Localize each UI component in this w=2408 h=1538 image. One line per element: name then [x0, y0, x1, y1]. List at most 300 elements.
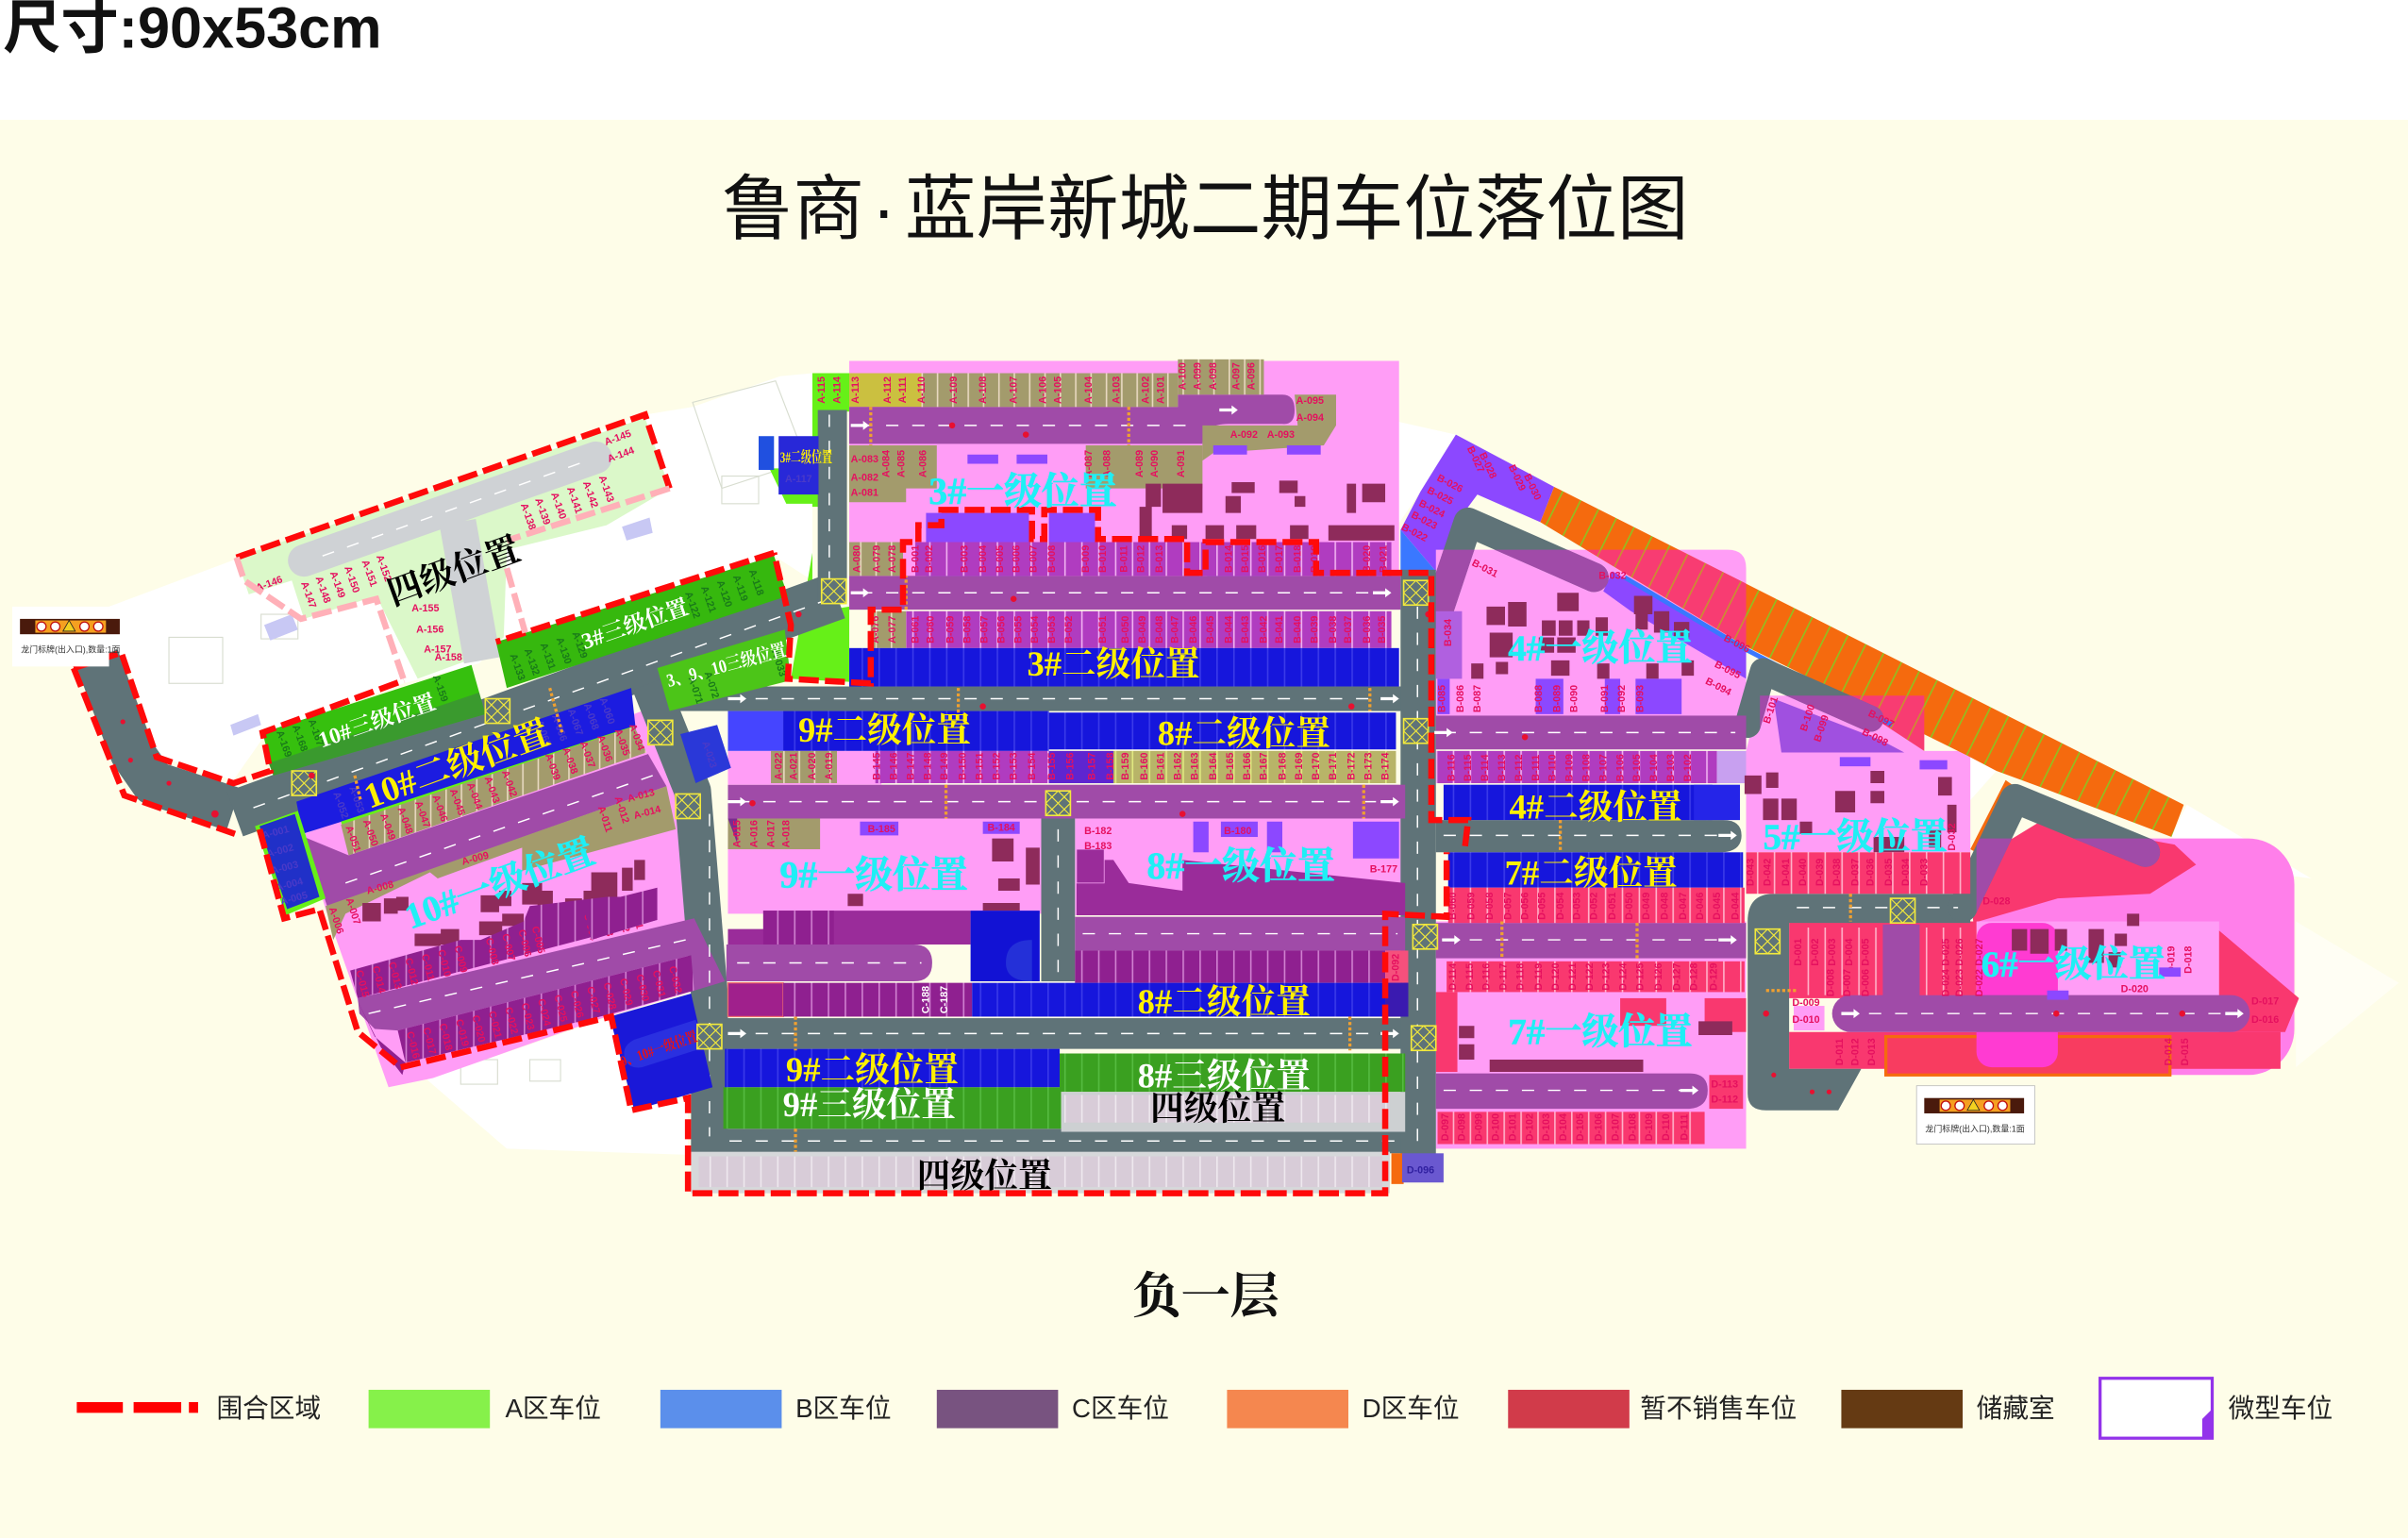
7# D lower row: D-100 — [1490, 1113, 1501, 1141]
drawing detail west — [169, 381, 806, 1084]
10# 二级 blue band: A-052 — [330, 791, 350, 820]
4# top spots: B-028 — [1477, 451, 1498, 480]
四级 spaces labels: A-157 — [424, 644, 451, 656]
4# B-085 row: B-088 — [1533, 685, 1545, 712]
10# 三级 green band: A-168 — [290, 724, 309, 753]
7# D lower row: D-110 — [1661, 1113, 1672, 1141]
3# B-001 row: A-080 — [851, 545, 862, 573]
7# D upper row: D-057 — [1503, 893, 1514, 920]
10# A-034 row: A-051 — [343, 824, 362, 854]
10# olive row 2: A-007 — [343, 896, 362, 927]
6# D rows: D-013 — [1866, 1038, 1878, 1066]
legend: A zone — [369, 1390, 601, 1429]
zone: lime green west of 3# — [769, 373, 849, 682]
4# B-085 row: B-090 — [1568, 685, 1580, 712]
9 10# 一级 cap — [624, 1020, 705, 1067]
6# D rows: D-027 — [1974, 938, 1985, 966]
10# 三级 green band: A-169 — [274, 729, 293, 759]
label: 9#三级位置: 9#三级位置 — [783, 1085, 956, 1124]
7# D lower row: D-102 — [1524, 1113, 1535, 1141]
9# 8# spaces row: B-145 — [872, 753, 883, 780]
9# 8# spaces row: B-166 — [1242, 753, 1253, 780]
7# D lower row — [1437, 1075, 1743, 1145]
四级 spaces labels: A-146 — [255, 574, 284, 594]
3# B-035 row: B-058 — [962, 616, 974, 644]
3# B-035 row: B-055 — [1012, 616, 1024, 644]
3# second row: A-081 to A-091: A-085 — [896, 450, 908, 477]
7# D lower row: D-108 — [1627, 1113, 1638, 1141]
9# lower spaces: C-188 — [921, 986, 932, 1013]
9# zone spaces — [727, 818, 1020, 849]
9# 8# spaces row: B-155 — [1046, 753, 1058, 780]
9# 8# spaces row: B-156 — [1065, 753, 1077, 780]
3# B-001 row: B-019 — [1309, 545, 1320, 573]
3 9 10 三级 green band: A-071 — [686, 676, 705, 705]
7# D lower row: D-103 — [1541, 1113, 1552, 1141]
5# loop spots: B-101 — [1762, 695, 1781, 725]
4# B-102 row: B-114 — [1480, 754, 1491, 781]
5# D row: D-037 — [1849, 859, 1861, 886]
9# 8# road — [727, 785, 1405, 818]
bottom strip — [1886, 1037, 2170, 1075]
10# C lower row: C-031 — [650, 969, 667, 998]
9# 8# spaces row — [727, 751, 1396, 785]
10# olive row 2: A-014 — [632, 804, 662, 822]
10# A-034 row: A-038 — [560, 745, 579, 776]
9# 8# spaces row: A-021 — [789, 753, 800, 780]
4# B-102 row — [1436, 751, 1747, 783]
3# top row: A-096 to A-115: A-097 — [1230, 362, 1242, 390]
10# A-034 row: A-042 — [499, 769, 519, 798]
3# top row: A-096 to A-115: A-104 — [1083, 376, 1095, 404]
orange D band — [1540, 487, 2183, 837]
label: 8#二级位置 upper: 8#二级位置 — [1158, 713, 1330, 752]
7# D upper row: B-060 — [1447, 893, 1459, 920]
3# top row: A-096 to A-115: A-108 — [978, 376, 989, 404]
4# B-102 row: B-110 — [1547, 754, 1559, 781]
blue corner — [1400, 530, 1436, 607]
4# B-102 row: B-106 — [1614, 754, 1626, 781]
road hatch marks — [355, 407, 1850, 1152]
7# D middle row: D-114 — [1447, 963, 1459, 990]
4# B-102 row: B-112 — [1513, 754, 1525, 781]
white site background west — [109, 373, 812, 780]
3# B-035 row: B-040 — [1293, 616, 1304, 644]
4# top spots: B-024 — [1417, 498, 1446, 521]
3# second row: A-081 to A-091: A-089 — [1134, 450, 1145, 477]
3# top row: A-096 to A-115: A-102 — [1140, 376, 1151, 404]
8# zone — [1077, 822, 1405, 915]
3# second row: A-081 to A-091: A-086 — [917, 450, 928, 477]
D-096 block — [1392, 1153, 1444, 1184]
8# 三级 band — [1060, 1054, 1405, 1092]
3# 二级 blue band — [849, 648, 1399, 687]
3# 二级 small block — [759, 436, 818, 494]
orange D band pink overlap 5# — [1840, 695, 1924, 751]
6# D rows: D-026 — [1954, 938, 1965, 966]
3# B-035 row: B-044 — [1223, 616, 1234, 644]
site plan — [12, 359, 2399, 1195]
10# C lower row: C-025 — [551, 994, 569, 1023]
四级 spaces labels — [255, 428, 636, 663]
10# C lower row: C-023 — [519, 1002, 536, 1031]
10# 一级 A-001 blue strip: A-005 — [279, 890, 309, 908]
7# D upper row: D-045 — [1712, 893, 1723, 920]
A-115 row yellow — [849, 373, 922, 407]
7# D upper row — [1447, 888, 1745, 923]
6# D rows: D-011 — [1834, 1039, 1846, 1065]
orange strip beside road — [1970, 780, 2021, 860]
9# 8# spaces row: B-164 — [1208, 753, 1219, 780]
3# B-001 row: B-015 — [1240, 545, 1251, 573]
6# D rows: D-025 — [1940, 938, 1951, 966]
四级 spaces labels: A-138 — [518, 502, 538, 531]
red zone: 6# upper — [1970, 820, 2196, 923]
6# D rows: D-005 — [1861, 938, 1872, 966]
7# D middle row — [1446, 961, 1745, 992]
10# 二级 blue band: A-053 — [346, 785, 366, 814]
10# C upper row: C-007 — [499, 932, 517, 962]
6# D rows: D-007 — [1842, 969, 1853, 996]
9# 8# spaces row: B-174 — [1380, 753, 1391, 780]
road center dashes — [254, 414, 2242, 1167]
5# D row: D-043 — [1746, 859, 1757, 886]
10# A-034 row: A-046 — [429, 794, 450, 823]
5# D row: D-042 — [1763, 859, 1774, 886]
10# A-034 row: A-039 — [543, 752, 562, 782]
10# 一级 A-001 blue strip — [255, 811, 326, 915]
3# top row: A-096 to A-115: A-109 — [948, 376, 960, 404]
10# C lower row: C-018 — [437, 1022, 455, 1052]
9 10# 一级 blue block — [610, 994, 712, 1111]
blue band edge — [1625, 577, 1892, 725]
7# D upper row: D-051 — [1607, 893, 1618, 920]
7# D middle row: D-127 — [1672, 962, 1683, 991]
zone labels — [315, 449, 2166, 1195]
3# B-001 row: B-013 — [1154, 545, 1165, 573]
3# B-035 row: B-050 — [1120, 616, 1131, 644]
6# D rows: D-018 — [2183, 946, 2195, 974]
legend: D zone — [1227, 1390, 1460, 1429]
3 9 10 三级 green band — [658, 629, 791, 711]
pink zone: 5# — [1747, 695, 1970, 852]
label: 5#一级位置: 5#一级位置 — [1763, 817, 1948, 858]
四级 spaces labels: A-141 — [564, 485, 584, 515]
3# second row: A-081 to A-091: A-088 — [1102, 450, 1113, 477]
pink zone: 9# — [727, 818, 1049, 913]
10# roads — [304, 754, 666, 906]
6# D rows: D-014 — [2163, 1038, 2174, 1066]
3# B-035 row: B-045 — [1205, 616, 1216, 644]
3 9 10 三级 green band: A-033 — [769, 648, 788, 678]
3# top row: A-096 to A-115: A-106 — [1037, 376, 1048, 404]
4# top spots: B-026 — [1435, 473, 1464, 495]
label: 9#二级位置 upper: 9#二级位置 — [798, 710, 971, 749]
四级 spaces labels: A-149 — [327, 570, 347, 599]
10# A-034 row: A-048 — [395, 806, 415, 836]
10# C lower row: C-028 — [601, 981, 618, 1011]
7# D upper row: D-054 — [1555, 893, 1566, 920]
9# 8# spaces row: B-159 — [1120, 753, 1131, 780]
四级 spaces labels: A-156 — [416, 625, 443, 636]
7# D middle row: D-122 — [1584, 962, 1596, 991]
3# 二级 small block: A-117 — [785, 474, 812, 485]
10# C lower row: C-029 — [617, 978, 635, 1007]
9# storage rooms — [847, 839, 1040, 911]
5# D row: D-032 — [1947, 823, 1958, 851]
red zone: 6# lower — [1789, 922, 2281, 1069]
7# D lower row: D-104 — [1558, 1113, 1569, 1141]
pink zone: 7# — [1436, 922, 1747, 1148]
7# D upper row: D-048 — [1660, 893, 1671, 920]
3# B-035 row: B-038 — [1328, 616, 1339, 644]
label: 9、10#一级位置: 9、10#一级位置 — [618, 1028, 700, 1070]
label: 4#二级位置: 4#二级位置 — [1509, 787, 1682, 826]
3# top row: A-096 to A-115: A-095 — [1296, 395, 1324, 407]
3# 三级 green band: A-122 — [682, 590, 702, 620]
pale blue markers — [230, 517, 653, 736]
9# zone spaces: A-016 — [748, 820, 760, 847]
10# C lower row: C-016 — [404, 1030, 422, 1060]
9# 8# spaces row: B-167 — [1259, 753, 1270, 780]
3# top row: A-096 to A-115: A-115 — [816, 376, 828, 404]
3# top row: A-096 to A-115: A-098 — [1208, 362, 1219, 390]
9# 8# spaces row: B-172 — [1346, 753, 1357, 780]
3# B-035 row: B-039 — [1309, 616, 1320, 644]
3# top row: A-096 to A-115: A-111 — [897, 376, 909, 403]
6# D rows: D-010 — [1792, 1014, 1820, 1026]
3# top row: A-096 to A-115: A-112 — [882, 376, 894, 404]
10# C upper row: C-009 — [452, 945, 469, 974]
4# B-102 row: B-108 — [1581, 754, 1593, 781]
label: 7#一级位置: 7#一级位置 — [1508, 1012, 1693, 1053]
6# D rows: D-009 — [1792, 997, 1820, 1009]
7# D lower row: D-112 — [1711, 1095, 1738, 1106]
3 9 10 三级 green band: A-072 — [702, 670, 721, 700]
red zone: 7# interior — [1436, 992, 1747, 1072]
6# storage rooms — [2012, 913, 2139, 967]
3# B-035 row: B-046 — [1188, 616, 1199, 644]
10# C upper row: C-014 — [370, 965, 387, 995]
7# D lower row: D-111 — [1680, 1114, 1691, 1141]
3# B-001 row: B-009 — [1080, 545, 1092, 573]
10# A-034 row: A-035 — [612, 727, 632, 758]
10# olive row 2: A-006 — [326, 906, 345, 935]
6# D rows: D-020 — [2121, 983, 2149, 995]
pink zone: 8# — [1075, 818, 1405, 915]
10# C lower row: C-019 — [453, 1018, 471, 1047]
red signal dots — [121, 423, 2185, 1095]
3# top row: A-096 to A-115: A-101 — [1156, 376, 1167, 404]
D-096 block: D-096 — [1407, 1164, 1434, 1176]
4# top spots: B-032 — [1598, 571, 1627, 582]
3# 三级 green band — [496, 556, 788, 688]
west gate sign: 龙门标牌(出入口),数量:1面 — [21, 644, 121, 655]
4# B-085 row: B-095 — [1713, 659, 1742, 681]
3# top row: A-096 to A-115: A-105 — [1053, 376, 1064, 404]
9# 二级 lower band — [725, 1049, 1060, 1087]
10# C lower row: C-027 — [584, 985, 602, 1015]
3# B-001 row: A-078 — [887, 545, 898, 573]
3# B-035 row: B-052 — [1063, 616, 1075, 644]
10# 二级 blue band — [296, 688, 636, 834]
orange D band pink overlap — [1586, 550, 1747, 646]
四级 band middle — [1062, 1092, 1405, 1132]
3# top row: A-096 to A-115: A-096 — [1246, 362, 1258, 390]
6# D rows: D-008 — [1825, 969, 1836, 996]
10# C upper row: C-012 — [403, 957, 420, 986]
9# 8# spaces row: B-170 — [1311, 753, 1322, 780]
10# C upper row: C-003 — [597, 908, 615, 938]
7# D upper row: D-058 — [1484, 893, 1496, 920]
9# 8# spaces row: B-173 — [1363, 753, 1374, 780]
3# top row: A-096 to A-115: A-114 — [831, 376, 843, 404]
10# 一级 A-001 blue strip: A-003 — [270, 859, 300, 878]
label: 9#二级位置 lower: 9#二级位置 — [786, 1050, 959, 1089]
red boundary main loop — [74, 414, 1468, 1194]
4# B-102 row: B-102 — [1682, 754, 1694, 781]
4# B-085 row: B-091 — [1599, 685, 1611, 712]
3# second row: A-081 to A-091: A-083 — [851, 454, 878, 465]
9# blue turning block — [971, 911, 1040, 981]
7# D lower row: D-105 — [1575, 1113, 1586, 1141]
pink zone: 10# — [304, 710, 725, 1087]
6# D rows: D-023 — [1954, 969, 1965, 996]
5# D row: D-040 — [1798, 859, 1809, 886]
purple road sections inside pink zones — [1437, 522, 2146, 908]
3# B-001 row: B-016 — [1257, 545, 1268, 573]
10# storage rooms — [362, 860, 645, 946]
3# B-001 row: B-014 — [1223, 545, 1234, 573]
3# B-035 row: B-054 — [1029, 616, 1041, 644]
3# second row: A-081 to A-091: A-087 — [1083, 450, 1095, 477]
10# A-034 row: A-037 — [577, 740, 597, 770]
3# 三级 green band: A-130 — [554, 636, 574, 665]
6# D rows: D-001 — [1793, 938, 1804, 966]
legend: not for sale: 暂不销售车位 — [1640, 1394, 1797, 1423]
7# D upper row: D-047 — [1678, 893, 1689, 920]
3# B-001 row: B-012 — [1136, 545, 1147, 573]
3# top row: A-096 to A-115: A-110 — [916, 376, 928, 404]
3# 三级 green band: A-131 — [538, 642, 558, 671]
legend: A zone: A区车位 — [505, 1394, 601, 1423]
white site fragments — [1967, 756, 2399, 1067]
legend: storage: 储藏室 — [1977, 1394, 2055, 1423]
legend: enclosure line: 围合区域 — [216, 1394, 321, 1423]
pink zone: 4# — [1436, 550, 1747, 715]
10# C lower row: C-017 — [420, 1027, 438, 1056]
10# 二级 blue band: A-068 — [581, 702, 601, 731]
strong magenta overlap — [1977, 923, 2058, 1067]
四级 spaces labels: A-155 — [411, 603, 439, 614]
3# second row: A-081 to A-091: A-082 — [851, 472, 878, 483]
4# top spots: B-030 — [1521, 473, 1543, 502]
4# B-102 row: B-115 — [1463, 754, 1474, 781]
4# storage rooms — [1471, 593, 1694, 678]
3# B-035 row: B-051 — [1097, 616, 1109, 644]
10# olive row 2: A-008 — [365, 879, 395, 897]
10# C lower row: C-021 — [486, 1010, 504, 1040]
4# B-085 row — [1437, 633, 1751, 714]
3# second row: A-081 to A-091: A-084 — [880, 450, 892, 477]
10# C upper row: C-005 — [529, 925, 546, 955]
4# west strip — [1436, 611, 1462, 678]
5# D row: D-033 — [1919, 859, 1931, 886]
label: 4#一级位置: 4#一级位置 — [1508, 628, 1693, 669]
10# C lower row — [398, 955, 694, 1062]
10# C upper row: C-015 — [353, 969, 371, 998]
3# top row: A-096 to A-115 — [816, 359, 1336, 460]
10# 三级 green band — [262, 665, 485, 776]
四级 spaces labels: A-148 — [313, 575, 333, 605]
3# second row: A-081 to A-091 — [849, 445, 1202, 502]
10# A-034 row — [341, 722, 646, 856]
7# D middle row: D-119 — [1533, 963, 1545, 990]
10# olive row 2 — [326, 786, 676, 940]
9# 8# spaces row: B-162 — [1173, 753, 1184, 780]
4# west strip: B-034 — [1443, 619, 1454, 646]
10# olive row 2: A-012 — [612, 795, 631, 825]
purple roads — [304, 394, 2249, 1109]
5# D row: D-039 — [1814, 859, 1826, 886]
9# lower spaces — [727, 911, 972, 1016]
9# 8# spaces row: B-147 — [905, 753, 916, 780]
3# B-035 row: B-056 — [995, 616, 1007, 644]
四级 band bottom — [691, 1152, 1390, 1194]
6# D rows: D-006 — [1861, 969, 1872, 996]
4# B-085 row: B-089 — [1552, 685, 1564, 712]
3# B-035 row: B-048 — [1154, 616, 1165, 644]
west gate sign — [12, 607, 121, 666]
D-092 spots — [1385, 950, 1408, 1016]
7# D middle row: D-121 — [1567, 962, 1579, 991]
3# B-001 row: B-006 — [1012, 545, 1023, 573]
7# D middle row: D-120 — [1550, 962, 1562, 991]
legend: C zone — [937, 1390, 1169, 1429]
3# 三级 green band: A-118 — [746, 568, 766, 597]
10# C upper row: C-008 — [483, 937, 501, 966]
四级 spaces labels: A-140 — [548, 491, 568, 521]
legend: enclosure line — [76, 1394, 321, 1423]
9# lower spaces: C-187 — [939, 986, 950, 1013]
10# 三级 green band: A-159 — [430, 674, 450, 703]
4# top spots: B-023 — [1409, 510, 1439, 532]
7# D upper row: D-046 — [1695, 893, 1706, 920]
9# 8# spaces row: B-148 — [922, 753, 933, 780]
3# B-001 row: B-021 — [1379, 545, 1390, 573]
9# zone spaces: B-185 — [868, 824, 895, 835]
white site background south — [426, 1016, 688, 1155]
10# C lower row: C-032 — [666, 965, 684, 995]
10# C upper row: C-010 — [435, 948, 453, 978]
9# zone spaces: B-184 — [988, 823, 1015, 834]
label: 9#一级位置: 9#一级位置 — [779, 854, 968, 896]
red zone: 6# right — [2219, 930, 2299, 1032]
4# B-085 row: B-085 — [1437, 685, 1448, 712]
7# D middle row: D-124 — [1618, 962, 1630, 991]
10# 二级 blue band: A-067 — [565, 708, 585, 737]
四级 spaces labels: A-147 — [298, 580, 318, 610]
10# 一级 A-001 blue strip: A-001 — [261, 824, 291, 842]
east gate sign: 龙门标牌(出入口),数量:1面 — [1925, 1124, 2025, 1134]
crossing boxes — [292, 579, 1915, 1050]
四级 spaces labels: A-142 — [580, 479, 600, 510]
5# D row: D-035 — [1883, 859, 1895, 886]
label: 3、9、10三级位置: 3、9、10三级位置 — [664, 640, 789, 692]
4# top spots: B-027 — [1464, 444, 1486, 475]
5# loop spots: B-100 — [1798, 703, 1817, 733]
6# roads — [1832, 995, 2249, 1032]
